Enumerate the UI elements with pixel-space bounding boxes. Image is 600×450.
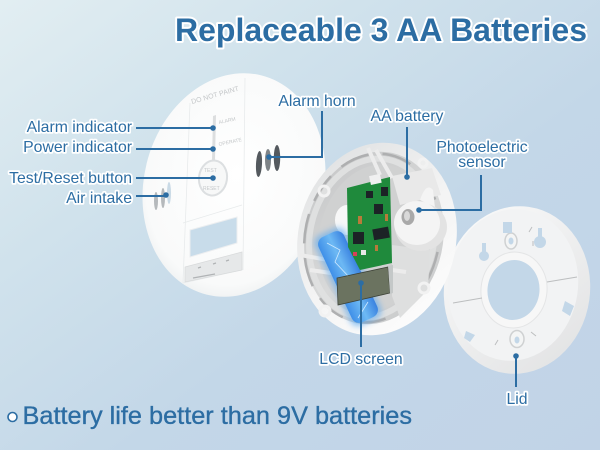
lid slots <box>453 227 577 345</box>
circuit board <box>347 174 392 270</box>
bullet marker <box>8 412 17 422</box>
detector front cover: OPERATE <box>218 137 243 148</box>
label: test reset button: Test/Reset button <box>9 170 132 187</box>
air intake vents <box>154 182 171 210</box>
inner housing <box>288 139 460 337</box>
front panel outlines <box>183 78 245 283</box>
detector front cover <box>119 54 349 316</box>
alarm horn vents <box>255 145 280 177</box>
label: AA battery <box>371 108 444 180</box>
outer rim <box>280 128 474 350</box>
bottom bracket <box>185 252 242 282</box>
battery window <box>190 217 237 257</box>
label: photoelectric sensor: sensor <box>458 154 506 171</box>
lid <box>433 197 600 383</box>
label: lid <box>506 353 528 408</box>
indicator labels: ALARM <box>218 117 236 126</box>
battery compartment block <box>392 168 441 205</box>
label: photoelectric sensor <box>416 139 528 213</box>
base lobe <box>335 205 359 235</box>
test reset button <box>197 159 229 197</box>
keyholes <box>479 228 546 261</box>
blue AA battery <box>311 225 385 329</box>
photoelectric sensor <box>394 188 447 251</box>
label: test reset button <box>9 170 216 187</box>
label: LCD screen: LCD screen <box>319 351 403 368</box>
LCD screen <box>337 265 393 305</box>
test reset button: TEST <box>204 168 217 174</box>
centre hole <box>485 257 542 323</box>
hole ring <box>477 249 551 331</box>
label: LCD screen <box>319 280 403 368</box>
label: air intake <box>66 190 169 207</box>
inner body <box>305 154 445 322</box>
connector <box>369 174 382 185</box>
label: power indicator: Power indicator <box>23 139 132 156</box>
label: alarm indicator: Alarm indicator <box>27 119 132 136</box>
open detector unit <box>280 128 474 350</box>
bracket screws <box>193 260 229 278</box>
label: AA battery: AA battery <box>371 108 444 125</box>
test reset button: RESET <box>203 186 220 192</box>
label: power indicator <box>23 139 216 156</box>
chips <box>353 187 390 244</box>
indicator slot <box>212 115 216 161</box>
label: alarm horn <box>266 93 356 160</box>
label: air intake: Air intake <box>66 190 132 207</box>
label: alarm horn: Alarm horn <box>278 93 356 110</box>
housing ribs <box>300 148 406 275</box>
label: lid: Lid <box>506 391 528 408</box>
screw bosses <box>505 233 524 348</box>
rib ring <box>295 147 449 329</box>
components <box>353 214 388 256</box>
lid inner face <box>438 201 588 369</box>
battery life statement: Battery life better than 9V batteries <box>22 402 412 430</box>
printed warning: DO NOT PAINT <box>191 85 240 106</box>
title: Replaceable 3 AA Batteries <box>175 12 587 48</box>
label: photoelectric sensor: Photoelectric <box>436 139 528 156</box>
label: alarm indicator <box>27 119 216 136</box>
square cutouts <box>464 222 574 342</box>
ring slots <box>289 141 455 335</box>
boss holes <box>508 238 520 344</box>
clip lugs <box>319 159 429 316</box>
lower right body <box>392 245 430 318</box>
